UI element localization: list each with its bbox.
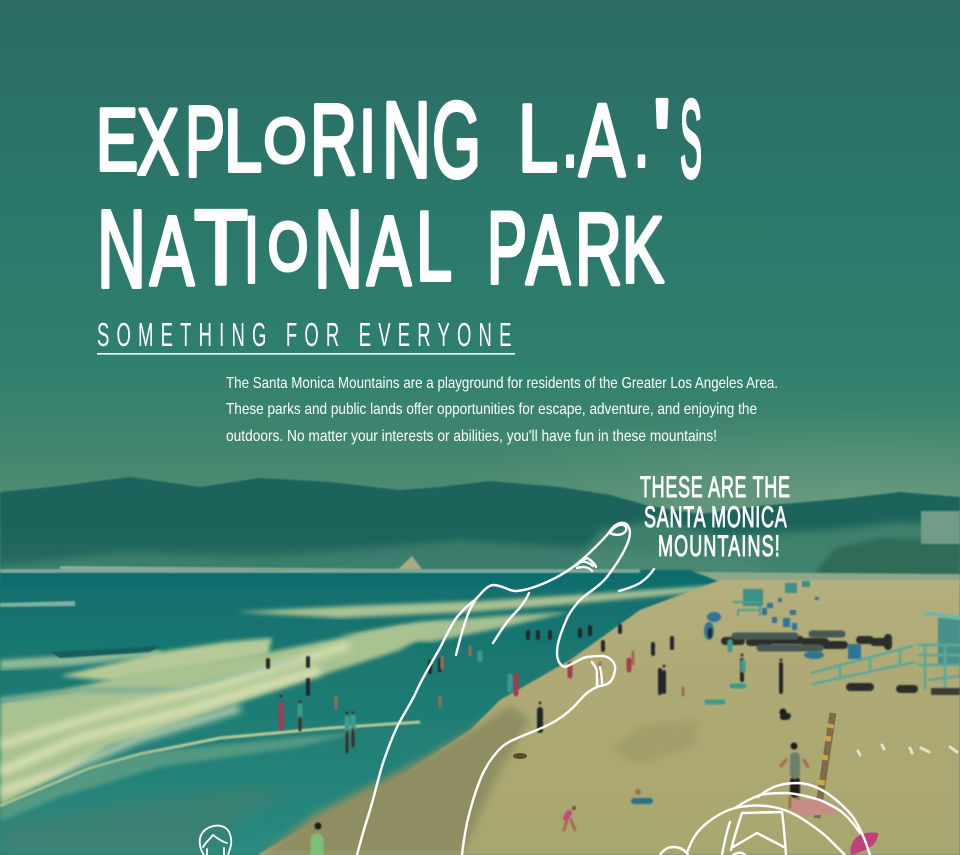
title line 1: ' (652, 74, 672, 213)
callout: these are the mountains: THESE ARE THE (640, 472, 790, 504)
title line 1: N (382, 79, 431, 200)
mountains (0, 477, 960, 585)
title line 1: L (224, 91, 262, 190)
line art: pointing hand (357, 523, 654, 855)
title line 2: T (194, 189, 248, 307)
knuckle creases (575, 558, 596, 571)
callout: these are the mountains: MOUNTAINS! (658, 531, 780, 563)
subtitle: SOMETHING FOR EVERYONE (97, 316, 511, 353)
waves and foam (0, 569, 720, 855)
title line 1: X (137, 89, 179, 194)
thumb creases (592, 662, 602, 687)
intro paragraph: These parks and public lands offer opportunities for escape, adventure, and enjoying the (226, 401, 757, 418)
ocean (0, 570, 720, 855)
intro paragraph: outdoors. No matter your interests or abilities, you'll have fun in these mountains! (226, 428, 717, 445)
title line 1: . (634, 86, 649, 186)
title line 2: P (487, 191, 527, 305)
title line 2: O (268, 209, 308, 285)
title line 1: I (359, 91, 376, 190)
title line 1: P (185, 86, 225, 198)
title (96, 74, 702, 311)
title line 2: L (416, 191, 452, 301)
infographic canvas: S (680, 78, 702, 201)
beach bins and umbrellas (704, 597, 861, 659)
icon: child head outline (200, 826, 231, 855)
title line 2: I (244, 197, 259, 302)
pink blanket (790, 800, 838, 816)
sand beach (257, 580, 960, 855)
seaweed on sand (513, 753, 527, 759)
title line 2: N (97, 188, 146, 311)
title line 2: A (367, 196, 411, 306)
striped wooden post (817, 713, 833, 818)
motion line (619, 569, 654, 591)
intro paragraph (226, 375, 778, 445)
intro paragraph: The Santa Monica Mountains are a playground for residents of the Greater Los Angeles Area. (226, 375, 778, 392)
title line 1: L (518, 85, 558, 192)
beachgoers (268, 626, 914, 855)
title line 1: R (310, 84, 357, 196)
title line 1: O (264, 107, 306, 176)
title line 2: R (575, 192, 622, 306)
title line 1: G (432, 79, 481, 200)
pink umbrella (851, 832, 878, 855)
fingernail (610, 525, 626, 535)
icon: tent and hiker outline (660, 783, 870, 855)
title line 2: N (314, 188, 363, 311)
post bands (821, 724, 831, 785)
title line 2: A (150, 196, 194, 306)
lifeguard towers and ramp (733, 581, 960, 695)
third finger (493, 593, 529, 643)
title line 1: . (562, 86, 578, 186)
title line 1: A (579, 83, 625, 198)
sky (0, 0, 960, 590)
title line 2: A (526, 195, 570, 305)
title line 1: E (96, 90, 138, 189)
callout: these are the mountains: SANTA MONICA (644, 502, 787, 534)
callout: these are the mountains (640, 472, 790, 563)
title line 2: K (622, 197, 664, 302)
seagulls (858, 745, 957, 755)
second finger (456, 601, 475, 655)
